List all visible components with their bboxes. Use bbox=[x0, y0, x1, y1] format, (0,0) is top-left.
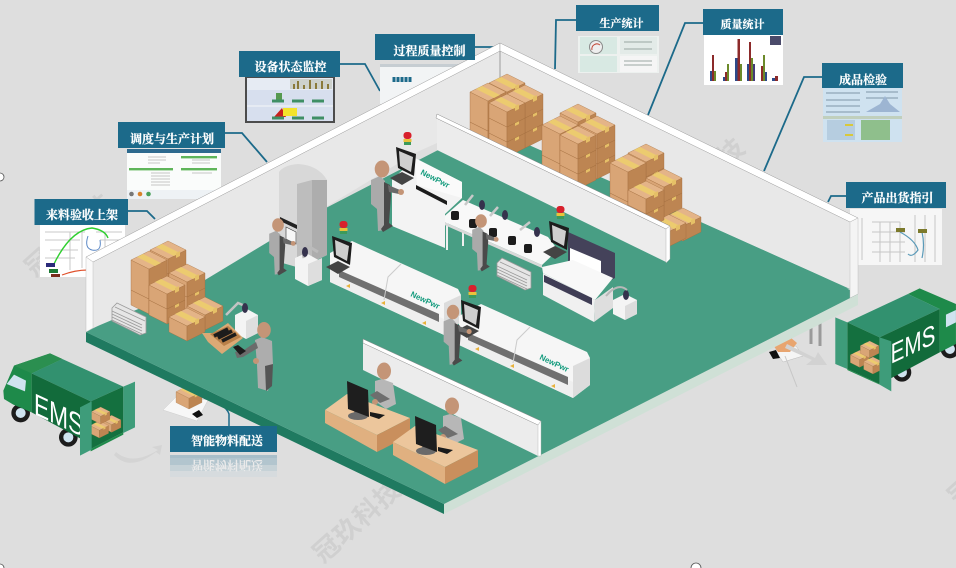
monitor 1 bbox=[347, 381, 385, 420]
carton stack A bbox=[470, 74, 543, 157]
carton stack C bbox=[610, 144, 682, 229]
tray rack left bbox=[112, 303, 146, 335]
label: 设备状态监控 bbox=[239, 51, 340, 77]
label: 生产统计 bbox=[576, 5, 659, 31]
label: 来料验收上架: 来料验收上架 bbox=[46, 207, 118, 222]
worker at robot table bbox=[472, 214, 499, 271]
thumbnail: quality bar chart bbox=[704, 35, 783, 85]
thumbnail: equipment status bbox=[245, 77, 335, 123]
label: 调度与生产计划: 调度与生产计划 bbox=[130, 131, 214, 146]
monitor and stack light 4 bbox=[543, 206, 569, 259]
monitor 2 bbox=[415, 416, 453, 455]
carton stack D bbox=[131, 241, 223, 341]
back aisle floor strip bbox=[520, 150, 850, 289]
worker at tower bbox=[269, 218, 296, 275]
watermarks: 冠玖科技 bbox=[19, 188, 119, 282]
label: 智能物料配送 bbox=[170, 426, 277, 452]
seated worker 2 bbox=[438, 398, 464, 444]
monitor and stack light 3 bbox=[455, 285, 481, 338]
thumbnail: finished goods inspection bbox=[823, 88, 902, 142]
label: 产品出货指引: 产品出货指引 bbox=[861, 190, 934, 205]
oven line A bbox=[392, 158, 462, 248]
label: 质量统计 bbox=[703, 9, 783, 35]
thumbnail: warehouse map bbox=[40, 224, 125, 277]
label: 调度与生产计划 bbox=[118, 122, 225, 148]
watermarks: 冠玖科技 bbox=[651, 132, 751, 226]
storage tower bbox=[279, 164, 327, 268]
label: 来料验收上架 bbox=[34, 199, 128, 225]
left delivery cart bbox=[163, 385, 229, 426]
label: 设备状态监控: 设备状态监控 bbox=[254, 59, 327, 74]
robot box right bbox=[606, 287, 637, 320]
thumbnail: process quality bbox=[380, 64, 472, 104]
back partition wall bbox=[436, 114, 670, 263]
desk 2 bbox=[393, 426, 478, 484]
left EMS truck: EMS bbox=[34, 387, 83, 443]
seated worker 1 bbox=[370, 362, 396, 409]
robot table bbox=[440, 195, 558, 268]
label: 成品检验 bbox=[822, 63, 903, 88]
monitor and stack light 1 bbox=[390, 132, 416, 185]
factory floor bbox=[86, 118, 858, 514]
slide handles bbox=[0, 173, 701, 568]
front short partition bbox=[363, 339, 541, 456]
tray rack centre bbox=[497, 258, 531, 290]
label: 质量统计: 质量统计 bbox=[720, 17, 764, 31]
label: 成品检验: 成品检验 bbox=[839, 72, 887, 87]
low cartons bbox=[650, 208, 701, 247]
oven line A: NewPwr bbox=[419, 168, 451, 190]
label: 生产统计: 生产统计 bbox=[600, 16, 644, 30]
thumbnail: shipping guide map bbox=[850, 209, 942, 265]
dark placement machine bbox=[542, 232, 615, 322]
robot station by tower bbox=[295, 246, 322, 286]
right EMS truck: EMS bbox=[891, 319, 935, 371]
label: 智能物料配送: 智能物料配送 bbox=[191, 433, 263, 448]
label reflection: 智能物料配送 bbox=[191, 458, 263, 473]
thumbnail: scheduling form bbox=[127, 149, 221, 199]
packing robot and open box bbox=[202, 303, 258, 354]
left wall bbox=[86, 43, 500, 332]
connector lines bbox=[128, 20, 846, 219]
carton stack B bbox=[542, 104, 615, 189]
worker upper bbox=[371, 160, 404, 232]
worker at packing bbox=[233, 322, 273, 391]
right EMS truck bbox=[835, 288, 956, 391]
watermarks: 冠玖科技 bbox=[307, 474, 407, 568]
label: 过程质量控制: 过程质量控制 bbox=[393, 43, 466, 58]
right wall bbox=[500, 43, 858, 298]
worker at oven C bbox=[444, 305, 472, 366]
thumbnail: production statistics bbox=[578, 36, 659, 73]
left EMS truck bbox=[3, 353, 135, 456]
inbound arrow bbox=[114, 445, 162, 463]
label: 产品出货指引 bbox=[846, 182, 946, 208]
desk 1 bbox=[325, 394, 410, 452]
watermarks bbox=[19, 132, 956, 568]
oven line C bbox=[459, 304, 590, 398]
label: 过程质量控制 bbox=[375, 34, 475, 60]
oven line B bbox=[330, 241, 461, 335]
label reflection bbox=[170, 455, 277, 477]
monitor and stack light 2 bbox=[326, 221, 352, 274]
right delivery cart bbox=[769, 322, 827, 387]
